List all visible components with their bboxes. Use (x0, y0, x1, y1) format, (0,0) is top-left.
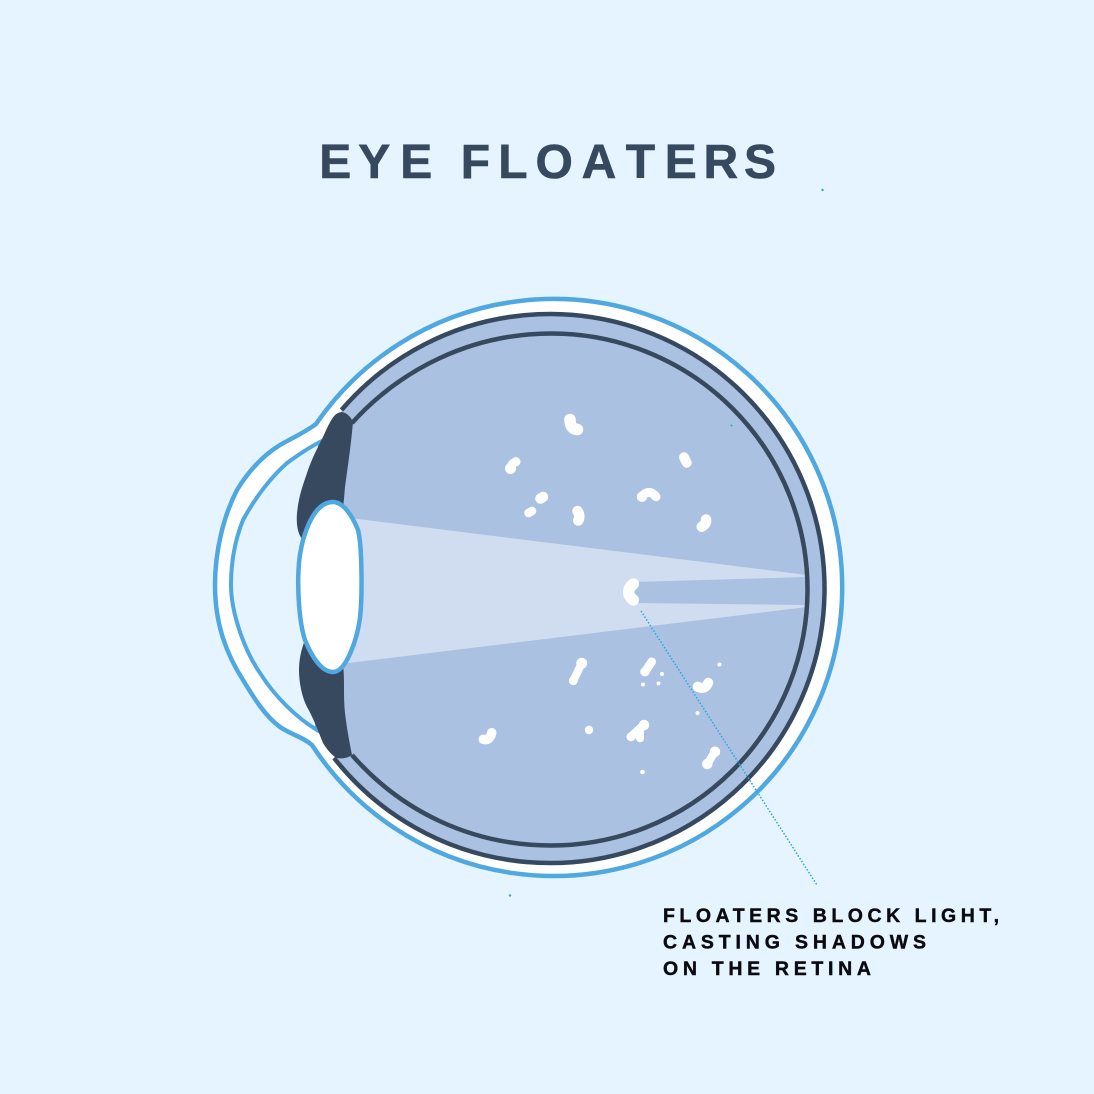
floaters lower group (483, 661, 718, 766)
upper iris (297, 412, 353, 540)
retina outer ring (334, 314, 825, 863)
stray specks (509, 189, 824, 897)
eye diagram (215, 299, 842, 876)
floaters upper group (508, 420, 706, 600)
callout text: FLOATERS BLOCK LIGHT, (663, 905, 999, 927)
sclera and cornea outer wall (215, 299, 842, 876)
floater shadow on retina (633, 577, 807, 605)
anterior chamber inner cornea line (231, 442, 320, 730)
callout text: CASTING SHADOWS (663, 932, 926, 954)
main floater casting shadow (629, 584, 633, 600)
callout text (663, 905, 999, 980)
dotted leader line (641, 611, 817, 885)
small floater dots (585, 662, 722, 774)
callout text: ON THE RETINA (663, 958, 871, 980)
title: EYE FLOATERS (319, 136, 776, 189)
vitreous body (334, 314, 825, 863)
lower iris (299, 640, 352, 758)
light beam (340, 518, 807, 664)
lens (298, 502, 362, 672)
retina inner ring (352, 334, 808, 846)
